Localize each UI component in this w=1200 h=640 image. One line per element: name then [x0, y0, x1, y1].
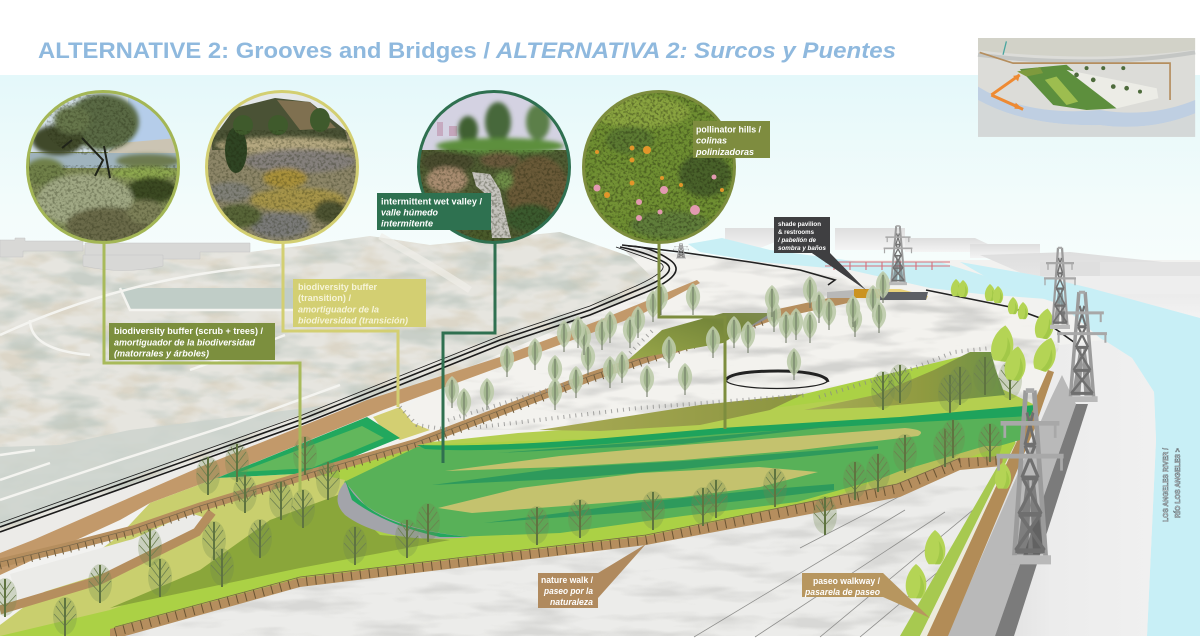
central green wetland [344, 405, 1035, 537]
river label [1161, 447, 1182, 522]
left terrain [0, 232, 700, 532]
river label: RÍO LOS ANGELES > [1173, 447, 1182, 518]
photo: wildflowers [582, 90, 736, 245]
photo ring 1 [28, 92, 178, 242]
buildings left [0, 238, 250, 270]
centre white terrain [340, 246, 1090, 520]
white mound between walkways [10, 513, 206, 600]
grey wedge [338, 480, 470, 539]
emerald channel [417, 405, 1035, 450]
road line to river [622, 245, 1078, 345]
brown strip beside railway [0, 280, 700, 575]
photo: transition meadow [205, 90, 359, 245]
label: biodiversity buffer transition: amortiguador de la [298, 304, 379, 316]
title: ALTERNATIVE 2: Grooves and Bridges / [38, 38, 490, 63]
olive ridge [539, 394, 804, 431]
ring seat [726, 371, 828, 388]
river label: LOS ANGELES RIVER / [1161, 447, 1170, 522]
red pedestrian bridge [825, 262, 950, 270]
railway tracks [0, 246, 676, 532]
label: shade pavilion: sombra y baños [778, 245, 826, 252]
khaki band upper [445, 428, 921, 471]
label: intermittent wet valley [377, 193, 491, 230]
olive slope [110, 495, 450, 608]
photo ring 4 [584, 92, 734, 242]
leader line: scrub and trees [104, 243, 300, 492]
label: biodiversity buffer transition: biodiversity buffer [298, 282, 377, 293]
title [38, 38, 896, 63]
label: intermittent wet valley: valle húmedo [381, 208, 438, 218]
label: pollinator hills [693, 121, 770, 158]
photo ring 2 [206, 92, 358, 242]
label: shade pavilion: & restrooms [778, 229, 814, 236]
lime river-side trees [906, 279, 1061, 598]
park ground: lime [0, 352, 1035, 636]
leader line: pollinator hills [659, 243, 725, 429]
label: biodiversity buffer scrub and trees: (matorrales y árboles) [114, 348, 209, 360]
right olive mound [804, 352, 1005, 410]
walkway strip and bridge [0, 298, 850, 610]
photo: scrub and trees [25, 90, 180, 245]
park trees [0, 356, 1022, 636]
leader line: wet valley [443, 243, 495, 463]
park ground: yellow at bridge [373, 407, 430, 440]
park ground: yellow-olive area [0, 473, 345, 636]
photo ring 3 [418, 92, 570, 242]
khaki strip at right edge [836, 446, 1000, 506]
bottom-right terrain and rail lines [110, 464, 1003, 637]
grey perimeter fence [400, 330, 991, 430]
label: intermittent wet valley: intermitente [381, 218, 434, 230]
label: pollinator hills: polinizadoras [695, 147, 754, 158]
label: biodiversity buffer scrub and trees: amortiguador de la biodiversidad [114, 338, 255, 348]
label: biodiversity buffer transition [293, 279, 426, 327]
label: paseo walkway [802, 573, 930, 618]
label: nature walk [538, 544, 646, 608]
label: biodiversity buffer transition: (transition) / [298, 293, 351, 304]
railway-side lower terrain [0, 408, 340, 560]
leader line: transition buffer [283, 243, 398, 407]
label: paseo walkway: paseo walkway / [813, 576, 880, 587]
label: paseo walkway: pasarela de paseo [804, 587, 880, 598]
label: shade pavilion: shade pavilion [778, 221, 821, 228]
label: shade pavilion [774, 217, 866, 290]
label: pollinator hills: colinas [696, 136, 727, 146]
label: biodiversity buffer scrub and trees [109, 323, 275, 360]
label: nature walk: nature walk / [541, 575, 593, 586]
side paths by river [900, 370, 1054, 636]
small green wedge [217, 417, 400, 478]
label: intermittent wet valley: intermittent wet valley / [381, 196, 482, 208]
dark channels [432, 423, 878, 523]
khaki band lower [438, 467, 818, 513]
yellow-lime strip [417, 388, 1035, 445]
label: nature walk: paseo por la [543, 586, 593, 597]
embankment [947, 340, 1156, 636]
label: nature walk: naturaleza [550, 597, 593, 608]
bottom walkway with fence [110, 456, 1003, 636]
transmission towers [673, 226, 1107, 560]
label: biodiversity buffer scrub and trees: biodiversity buffer (scrub + trees) / [114, 326, 263, 337]
pollinator hill mound [628, 313, 772, 360]
river upper channel [688, 238, 1060, 300]
label: biodiversity buffer transition: biodiversidad (transición) [298, 316, 408, 326]
label: pollinator hills: pollinator hills / [696, 124, 761, 136]
far city buildings right [725, 228, 1200, 321]
label: shade pavilion: / pabellón de [777, 237, 816, 244]
photo: wet valley [417, 90, 571, 245]
title: ALTERNATIVA 2: Surcos y Puentes [495, 38, 896, 63]
inset locator map [978, 38, 1195, 137]
shade pavilion [827, 289, 928, 300]
los angeles river [960, 262, 1200, 636]
pale trees [445, 271, 890, 420]
